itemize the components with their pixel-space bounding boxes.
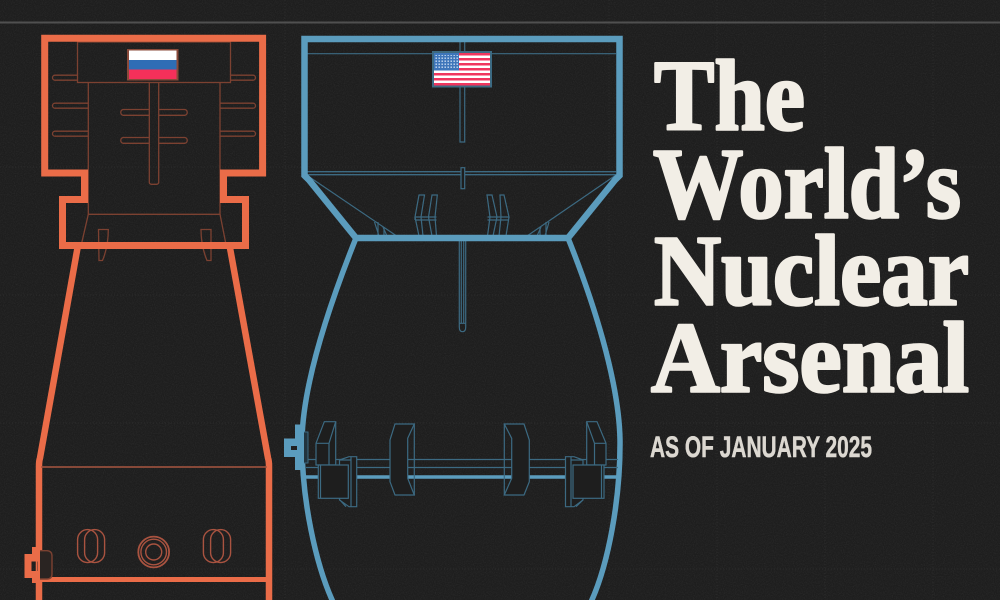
bomb: United States	[284, 39, 620, 600]
side lug	[284, 424, 308, 470]
axle rods	[305, 460, 618, 477]
bomb: Russia	[24, 38, 269, 600]
title: World’s	[653, 128, 961, 240]
subtitle: AS OF JANUARY 2025	[650, 431, 872, 464]
left mechanism blocks	[316, 422, 414, 507]
US bomb nose outline	[304, 39, 620, 238]
tail ovals and center ring	[78, 530, 231, 567]
right mechanism blocks	[504, 422, 606, 507]
US bomb waist line	[356, 236, 568, 240]
US bomb nose wireframe	[307, 42, 616, 332]
US bomb body outline	[302, 238, 620, 600]
title: Nuclear	[654, 214, 969, 326]
title: The	[654, 40, 805, 152]
tail band lines	[39, 467, 269, 580]
flag: Russia	[127, 49, 178, 80]
Russia bomb casing outline	[45, 38, 263, 245]
title	[651, 40, 969, 414]
side lug	[24, 547, 52, 583]
title: Arsenal	[651, 302, 969, 414]
flag: United States	[432, 51, 492, 88]
Russia bomb internal wireframe	[52, 42, 256, 260]
Russia bomb body outline	[39, 248, 269, 600]
